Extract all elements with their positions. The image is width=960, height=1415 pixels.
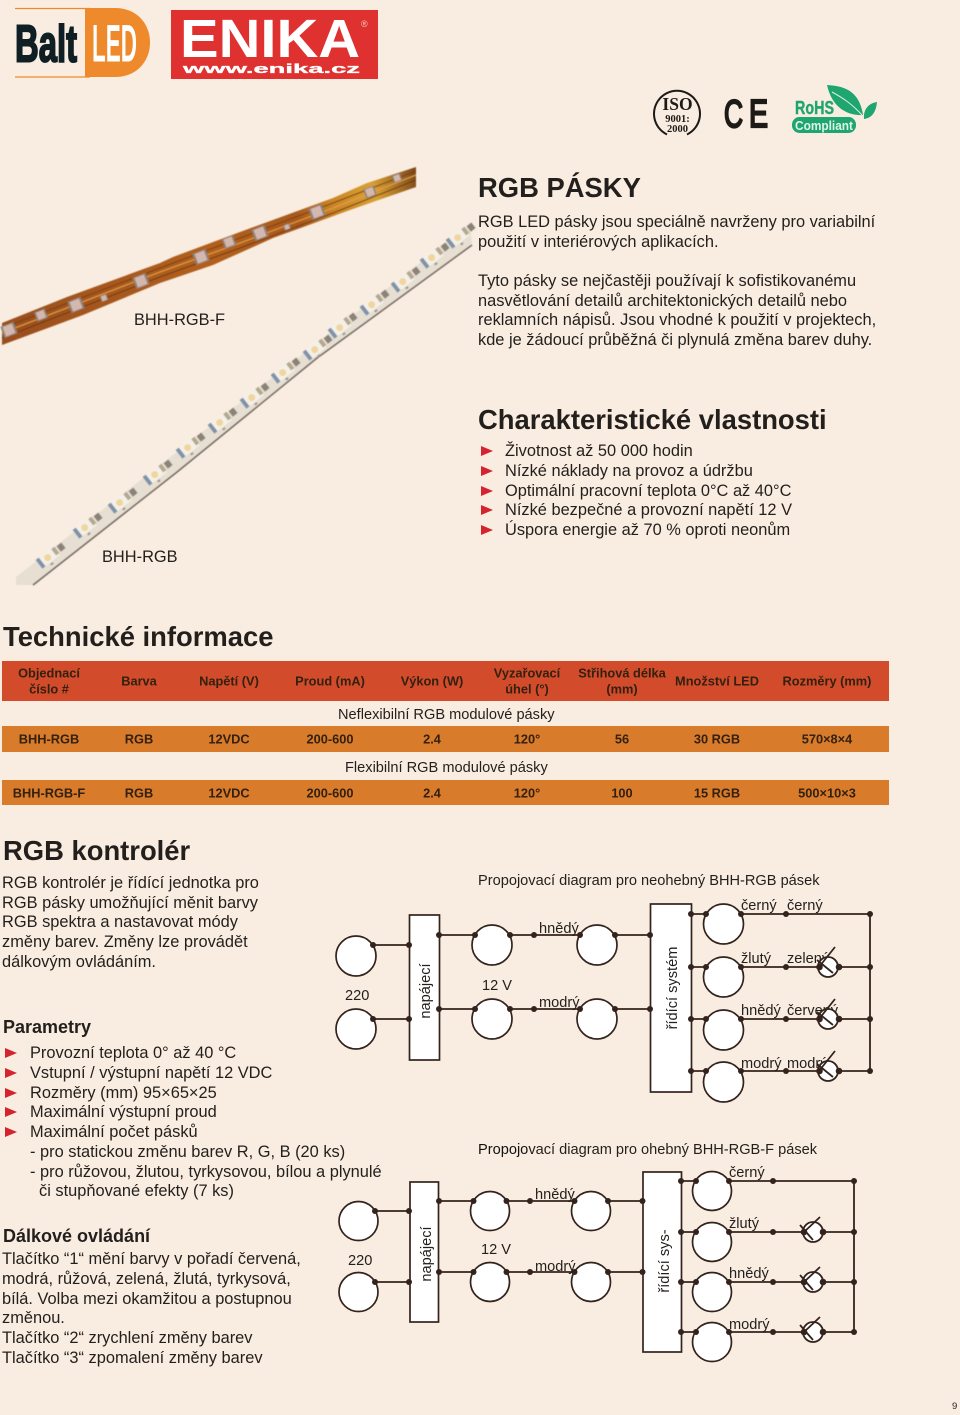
logo: Enika: ENIKA <box>180 10 360 69</box>
wiring diagram: BHH-RGB-F: řídící sys- <box>657 1229 673 1293</box>
wiring diagram: BHH-RGB: hnědý <box>539 921 579 937</box>
icon: CE mark <box>724 93 768 136</box>
photo: flexible orange strip BHH-RGB-F <box>0 167 416 345</box>
wiring diagram: BHH-RGB-F: hnědý <box>729 1266 769 1282</box>
label: BHH-RGB-F: BHH-RGB-F <box>134 311 225 329</box>
table row: BHH-RGB: 2.4 <box>423 731 441 746</box>
list: features: Životnost až 50 000 hodin <box>505 442 693 460</box>
icon: CE mark: E <box>749 93 768 136</box>
wiring diagram: BHH-RGB-F: hnědý <box>535 1187 575 1203</box>
wiring diagram: BHH-RGB: 12 V <box>482 978 512 994</box>
wiring diagram: BHH-RGB-F: modrý <box>729 1317 770 1333</box>
table row: BHH-RGB-F: 500×10×3 <box>798 785 856 800</box>
table header row: číslo # <box>29 681 69 696</box>
table row: BHH-RGB-F: 12VDC <box>208 785 250 800</box>
photos: LED strips <box>0 166 476 586</box>
wiring diagram: BHH-RGB: červený <box>787 1003 839 1019</box>
list: parameters: - pro růžovou, žlutou, tyrkysovou, bílou a plynulé <box>30 1162 382 1180</box>
text block: controller description: RGB spektra a nastavovat módy <box>2 913 238 931</box>
table header row: Objednací <box>18 666 80 680</box>
text block: remote control: Tlačítko “2“ zrychlení změny barev <box>2 1329 252 1347</box>
icon: ISO 9001:2000: ISO <box>662 94 693 114</box>
logo: Enika: www.enika.cz <box>181 61 361 76</box>
icon: CE mark: C <box>724 93 743 136</box>
list: features: Nízké náklady na provoz a údržbu <box>505 462 753 480</box>
table row: BHH-RGB: 56 <box>615 731 629 746</box>
logo: Balt LED <box>15 8 150 78</box>
heading: RGB PÁSKY: RGB PÁSKY <box>478 172 641 203</box>
text block: controller description: dálkovým ovládáním. <box>2 953 156 971</box>
table row: BHH-RGB: 30 RGB <box>694 731 740 746</box>
wiring diagram: BHH-RGB: žlutý <box>741 951 772 967</box>
table row: BHH-RGB: RGB <box>125 731 153 746</box>
table row: BHH-RGB <box>2 726 889 752</box>
list: features: Nízké bezpečné a provozní napětí 12 V <box>505 501 792 519</box>
lamps <box>800 1217 825 1342</box>
list: features: Úspora energie až 70 % oproti neonům <box>505 521 790 539</box>
text block: remote control: změnou. <box>2 1309 65 1327</box>
table header row: Výkon (W) <box>401 673 463 688</box>
list: parameters: Provozní teplota 0° až 40 °C <box>30 1044 236 1062</box>
text block: intro: nasvětlování detailů architektonických detailů nebo <box>478 292 847 310</box>
logo: Enika <box>171 10 378 79</box>
list: features <box>481 441 792 539</box>
list: parameters: Maximální počet pásků <box>30 1123 198 1141</box>
wiring diagram: BHH-RGB: černý <box>787 898 823 914</box>
text block: intro: reklamních nápisů. Jsou vhodné k použití v projektech, <box>478 311 876 329</box>
wiring diagram: BHH-RGB: modrý <box>741 1056 782 1072</box>
heading: Technické informace: Technické informace <box>3 621 273 652</box>
table row: BHH-RGB: 200-600 <box>307 731 353 746</box>
table header row: Množství LED <box>675 673 759 688</box>
table: technical data <box>2 661 889 805</box>
text block: controller description: RGB kontrolér je řídící jednotka pro <box>2 874 259 892</box>
text block: remote control: Tlačítko “3“ zpomalení změny barev <box>2 1349 263 1367</box>
table row: BHH-RGB: BHH-RGB <box>19 731 79 746</box>
heading: RGB kontrolér: RGB kontrolér <box>3 835 190 866</box>
table header row: Barva <box>121 673 157 688</box>
text block: controller description: RGB pásky umožňující měnit barvy <box>2 894 258 912</box>
table row: BHH-RGB-F: 100 <box>611 785 633 800</box>
wiring diagram: BHH-RGB-F: černý <box>729 1165 765 1181</box>
icon: RoHS compliant <box>792 85 877 133</box>
wiring diagram: BHH-RGB-F: žlutý <box>729 1216 760 1232</box>
wiring diagram: BHH-RGB: řídící systém <box>665 947 681 1029</box>
text block: intro: RGB LED pásky jsou speciálně navrženy pro variabilní <box>478 213 875 231</box>
list: features: Optimální pracovní teplota 0°C až 40°C <box>505 482 791 500</box>
table header row: úhel (°) <box>505 681 549 696</box>
wiring diagram: BHH-RGB: napájecí <box>418 963 434 1019</box>
wiring diagram: BHH-RGB <box>335 898 873 1103</box>
list: parameters: Maximální výstupní proud <box>30 1103 217 1121</box>
list: parameters: Rozměry (mm) 95×65×25 <box>30 1084 217 1102</box>
table row: BHH-RGB: 12VDC <box>208 731 250 746</box>
table subheading: flexible strips: Flexibilní RGB modulové pásky <box>345 760 548 776</box>
logo: Balt LED: Balt <box>15 16 77 74</box>
table row: BHH-RGB: 120° <box>514 731 540 746</box>
list: parameters: Vstupní / výstupní napětí 12 VDC <box>30 1064 272 1082</box>
text block: controller description <box>2 874 259 971</box>
label: BHH-RGB: BHH-RGB <box>102 548 178 566</box>
wiring diagram: BHH-RGB-F: 12 V <box>481 1242 511 1258</box>
table row: BHH-RGB-F <box>2 780 889 805</box>
text block: remote control <box>2 1250 301 1367</box>
text block: remote control: modrá, růžová, zelená, žlutá, tyrkysová, <box>2 1270 291 1288</box>
page number: 9 <box>952 1401 957 1412</box>
list: parameters: - pro statickou změnu barev R, G, B (20 ks) <box>30 1143 345 1161</box>
table row: BHH-RGB-F: 120° <box>514 785 540 800</box>
wiring diagram: BHH-RGB: 220 <box>345 988 369 1004</box>
table row: BHH-RGB-F: 15 RGB <box>694 785 740 800</box>
text block: intro: Tyto pásky se nejčastěji používají k sofistikovanému <box>478 272 856 290</box>
table subheading: rigid strips: Neflexibilní RGB modulové pásky <box>338 707 555 723</box>
icon: RoHS compliant: RoHS <box>795 98 834 118</box>
table header row: Proud (mA) <box>295 673 365 688</box>
table header row: Rozměry (mm) <box>783 673 871 688</box>
table header row: Napětí (V) <box>199 673 259 688</box>
list: parameters: či stupňované efekty (7 ks) <box>39 1182 234 1200</box>
text block: controller description: změny barev. Změny lze provádět <box>2 933 248 951</box>
wiring diagram: BHH-RGB-F <box>338 1165 857 1362</box>
heading: Dálkové ovládání: Dálkové ovládání <box>3 1226 150 1246</box>
table header row: (mm) <box>606 681 638 696</box>
heading: Charakteristické vlastnosti: Charakteristické vlastnosti <box>478 404 827 435</box>
table header row: Střihová délka <box>578 666 666 680</box>
wiring diagram: BHH-RGB-F: napájecí <box>419 1226 435 1282</box>
wiring diagram: BHH-RGB: zelený <box>787 951 830 967</box>
icon: ISO 9001:2000: 2000 <box>667 124 688 135</box>
certification icons: ISO, CE, RoHS <box>653 85 877 136</box>
table row: BHH-RGB-F: BHH-RGB-F <box>13 785 85 800</box>
text block: remote control: bílá. Volba mezi okamžitou a postupnou <box>2 1290 292 1308</box>
table header row <box>2 661 889 701</box>
table row: BHH-RGB-F: 200-600 <box>307 785 353 800</box>
table header row: Vyzařovací <box>494 666 560 680</box>
wiring diagram: BHH-RGB: modrý <box>539 995 580 1011</box>
text block: remote control: Tlačítko “1“ mění barvy v pořadí červená, <box>2 1250 301 1268</box>
icon: ISO 9001:2000 <box>654 91 700 135</box>
diagram title: BHH-RGB-F: Propojovací diagram pro ohebný BHH-RGB-F pásek <box>478 1142 817 1158</box>
icon: RoHS compliant: Compliant <box>795 119 854 133</box>
text block: intro <box>478 213 876 349</box>
text block: intro: použití v interiérových aplikacích. <box>478 233 719 251</box>
wiring diagram: BHH-RGB: modrý <box>787 1056 828 1072</box>
photo: rigid white strip BHH-RGB <box>16 221 479 585</box>
heading: Parametry: Parametry <box>3 1017 91 1037</box>
wiring diagram: BHH-RGB: černý <box>741 898 777 914</box>
text block: intro: kde je žádoucí průběžná či plynulá změna barev duhy. <box>478 331 872 349</box>
table row: BHH-RGB: 570×8×4 <box>802 731 852 746</box>
table row: BHH-RGB-F: 2.4 <box>423 785 441 800</box>
diagram title: BHH-RGB: Propojovací diagram pro neohebný BHH-RGB pásek <box>478 873 820 889</box>
list: parameters <box>5 1044 382 1200</box>
icon: ISO 9001:2000: 9001: <box>665 114 690 125</box>
wiring diagram: BHH-RGB-F: modrý <box>535 1259 576 1275</box>
wiring diagram: BHH-RGB-F: 220 <box>348 1253 372 1269</box>
lamps <box>817 947 841 1081</box>
wiring diagram: BHH-RGB: hnědý <box>741 1003 781 1019</box>
table row: BHH-RGB-F: RGB <box>125 785 153 800</box>
logo: Enika: ® <box>361 19 368 29</box>
